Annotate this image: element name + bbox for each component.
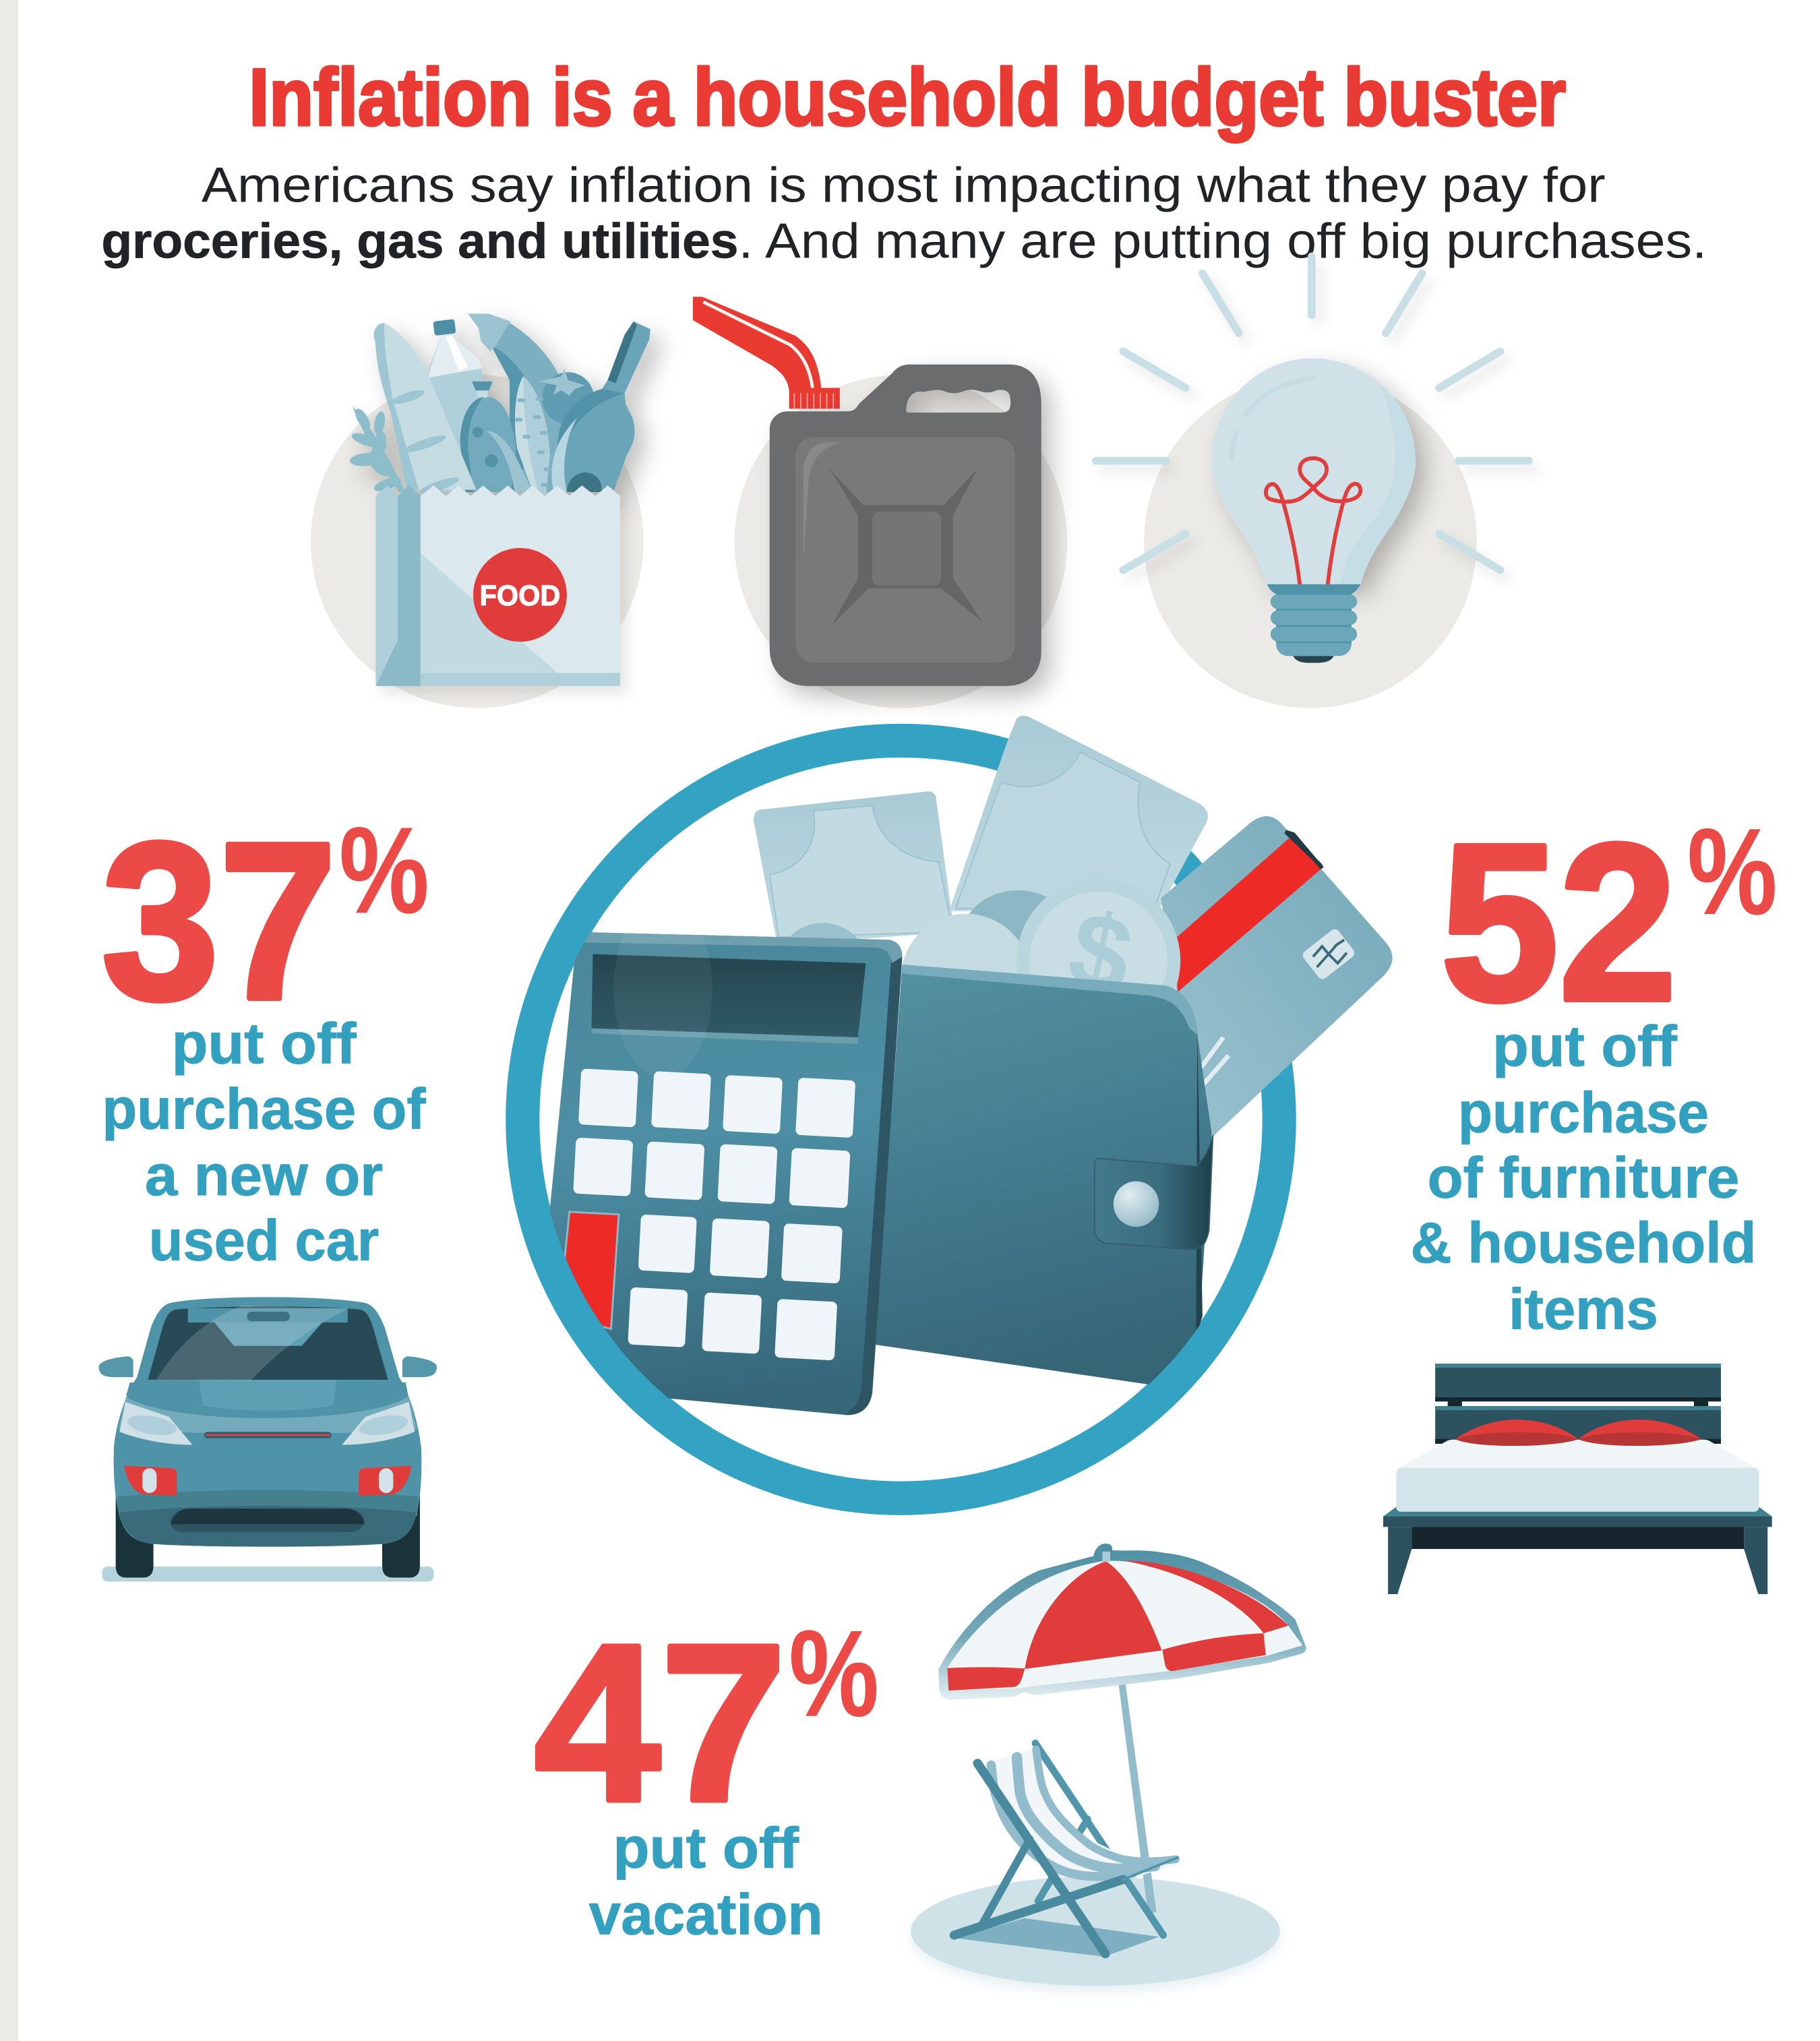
- corn: [515, 376, 550, 495]
- label: car stat: [102, 1012, 426, 1272]
- headlights: [119, 1402, 192, 1445]
- mirrors: [99, 1356, 140, 1377]
- eggplant: [467, 312, 572, 492]
- glass: [1211, 359, 1416, 584]
- wallet: [875, 965, 1213, 1388]
- icon backdrop circle: gas: [735, 375, 1067, 708]
- baguette: [374, 323, 477, 490]
- label: vacation stat: vacation: [589, 1883, 823, 1947]
- clasp button: [1114, 1181, 1159, 1227]
- label: car stat: put off: [172, 1012, 357, 1076]
- label: car stat: purchase of: [102, 1076, 426, 1140]
- label: furniture stat: purchase: [1458, 1080, 1709, 1145]
- tomato: [542, 372, 594, 425]
- can panel: [795, 437, 1015, 663]
- mattress: [1399, 1440, 1757, 1468]
- icon: light bulb: [1096, 256, 1529, 663]
- bag body: [375, 485, 620, 686]
- can body: [770, 365, 1041, 686]
- icon: car: [99, 1297, 437, 1581]
- label: furniture stat: items: [1509, 1277, 1658, 1341]
- food label: [473, 548, 567, 642]
- left margin strip: [0, 0, 18, 2041]
- reflected highlight: [613, 901, 712, 1078]
- calculator red key: [559, 1212, 619, 1329]
- bulb base: [1267, 584, 1360, 663]
- band and hood: [119, 1397, 417, 1433]
- label: vacation stat: put off: [613, 1816, 799, 1880]
- chair: [954, 1743, 1180, 1954]
- subtitle: groceries, gas and utilities: [101, 213, 738, 268]
- bed frame: [1383, 1507, 1772, 1527]
- water bottle: [429, 336, 514, 492]
- subtitle: . And many are putting off big purchases.: [738, 213, 1707, 268]
- sand: [911, 1877, 1280, 1986]
- central illustration: money, wallet and calculator: [533, 716, 1393, 1415]
- label: car stat: used car: [149, 1208, 379, 1272]
- filament: [1266, 458, 1360, 584]
- canopy: [938, 1544, 1306, 1700]
- title: Inflation is a household budget buster: [249, 53, 1566, 142]
- lower bumper: [117, 1490, 419, 1517]
- calculator screen: [592, 954, 866, 1037]
- stat: 52 percent: %: [1687, 804, 1777, 940]
- wallet clasp: [1095, 1135, 1213, 1250]
- pole: [1118, 1676, 1156, 1914]
- calculator: [533, 932, 902, 1415]
- icon backdrop circle: groceries: [311, 375, 644, 708]
- bag contents: [349, 312, 650, 497]
- label: car stat: a new or: [145, 1143, 383, 1207]
- car body: [114, 1297, 421, 1547]
- chair shadow: [956, 1918, 1159, 1957]
- calculator keys: [573, 1068, 855, 1360]
- label: furniture stat: [1411, 1014, 1757, 1341]
- icon: bed: [1383, 1364, 1772, 1594]
- stat: 47 percent: %: [789, 1606, 879, 1742]
- central ring: [522, 741, 1279, 1498]
- label: furniture stat: put off: [1492, 1014, 1678, 1078]
- bank note right: [949, 716, 1208, 911]
- grille line: [204, 1432, 332, 1438]
- pickle jar: [460, 397, 516, 492]
- wine bottle: [562, 322, 650, 492]
- food label: FOOD: [480, 580, 560, 611]
- credit card: [1161, 816, 1393, 1140]
- rays: [1096, 256, 1529, 570]
- subtitle: [101, 157, 1707, 268]
- subtitle: Americans say inflation is most impacting what they pay for: [202, 157, 1606, 212]
- chair fabric: [985, 1747, 1180, 1881]
- stat: 47 percent: 47: [535, 1599, 787, 1848]
- icon: gas can: [693, 297, 1041, 686]
- icon: beach umbrella and chair: [911, 1544, 1306, 1986]
- windshield: [148, 1306, 388, 1380]
- label: furniture stat: & household: [1411, 1211, 1757, 1275]
- tail lights: [124, 1465, 177, 1496]
- icon backdrop circle: utilities: [1144, 375, 1477, 708]
- label: furniture stat: of furniture: [1428, 1146, 1739, 1210]
- coins: [776, 879, 1180, 1044]
- stat: 37 percent: 37: [101, 797, 337, 1046]
- stat: 52 percent: 52: [1440, 798, 1677, 1047]
- stat: 37 percent: %: [339, 803, 429, 939]
- pillows: [1455, 1420, 1578, 1446]
- coins: $: [1059, 888, 1142, 1017]
- parsley leaves: [349, 406, 406, 494]
- label: vacation stat: [589, 1816, 823, 1947]
- bank note left: [754, 791, 954, 945]
- icon: grocery bag: [349, 312, 650, 686]
- spout: [693, 297, 840, 408]
